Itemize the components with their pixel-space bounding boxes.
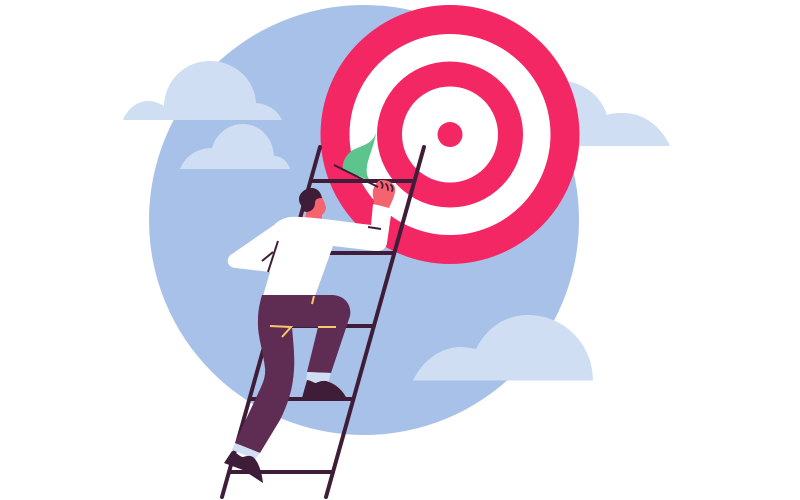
cloud: upper left (123, 61, 282, 120)
trousers (235, 295, 350, 453)
neck and face (304, 196, 326, 224)
socks (232, 372, 331, 459)
person (224, 188, 392, 483)
trouser crease lines (270, 296, 336, 337)
hair (299, 188, 322, 212)
cloud: lower right (413, 315, 593, 380)
hand (373, 180, 395, 208)
cloud: small middle left (180, 124, 290, 169)
fingers (381, 182, 393, 191)
arrow fletching: green leaf (343, 133, 376, 181)
cloud: right behind target (560, 80, 670, 146)
background circle (149, 5, 579, 435)
ladder: rungs and left rail (222, 147, 414, 497)
ladder: right rail (326, 147, 424, 497)
shoes (224, 380, 347, 483)
white shirt and arms (228, 204, 392, 296)
shirt crease lines (262, 227, 381, 272)
arrow shaft (334, 165, 378, 187)
target (320, 5, 580, 264)
